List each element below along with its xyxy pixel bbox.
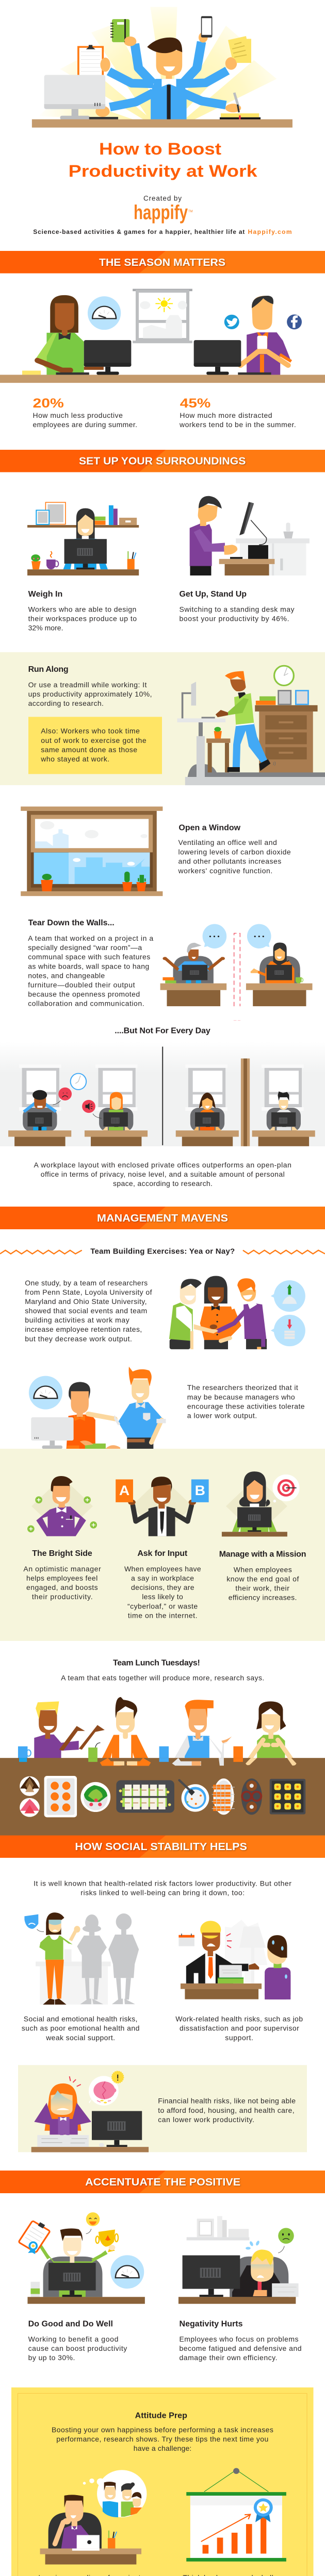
text: enclosed offices [34,1161,291,1188]
illustration: negativity hurts [178,2216,299,2304]
subheading: but not for every day: ....But Not For Every Day [115,1026,210,1036]
text: team building study: increase employee retention rates, [25,1325,142,1333]
text: team building study: Maryland and Ohio State University, [25,1297,147,1306]
text: tear down the walls: A team that worked on a project in a [28,934,153,942]
illustration: work-related risk [178,1920,290,1999]
text: ask for input: Ask for Input [137,1549,188,1558]
panel: run along: according to research. [28,699,104,707]
text: open a window [177,823,291,875]
text: tear down the walls: notes, and changeable [28,971,105,979]
text: team building study: but they decrease work output. [25,1335,132,1343]
text: negativity hurts [180,2320,301,2362]
text: the bright side: their productivity. [32,1592,93,1601]
stat: 20%: 20% [33,396,64,411]
illustration: worried about money [31,2071,149,2152]
text: negativity hurts: Negativity Hurts [180,2320,243,2329]
text: manage with a mission: their work, their [235,1584,289,1592]
text: weigh in: Workers who are able to design [28,605,136,613]
text: manage with a mission: Manage with a Mission [219,1550,306,1558]
created by happify logo: TM [188,210,193,213]
text: negativity hurts: become fatigued and defensive and [180,2344,301,2352]
text: team building study: from Penn State, Loyola University of [25,1288,152,1296]
text: enclosed offices: office in terms of privacy, noise level, and a suitable amount of personal [41,1170,285,1178]
text: open a window: Open a Window [178,823,241,832]
text: manage with a mission: efficiency increases. [229,1594,297,1602]
illustration: mission manager [222,1471,300,1536]
panel: financial risk [18,2065,307,2152]
illustration: treadmill desk [177,666,325,785]
panel: manager types [0,1449,325,1641]
text: team building study: building activities at work may [25,1316,129,1324]
section banner: the season matters [0,251,325,273]
text: the bright side [23,1549,101,1601]
text: weigh in: Weigh In [28,590,62,599]
text: team building study [25,1279,152,1343]
text: team building study: One study, by a team of researchers [25,1279,148,1287]
tagline: Science-based activities & games for a happier, healthier life at [33,228,245,235]
text: tear down the walls: Tear Down the Walls... [28,919,115,927]
text: social and emotional: Social and emotional health risks, [24,2015,137,2023]
illustration: ask for input [116,1477,209,1536]
illustration: manager encouraging employee [29,1367,166,1449]
subheading with zigzags: team building: Team Building Exercises: Yea or Nay? [90,1247,235,1256]
text: enclosed offices: A workplace layout with enclosed private offices outperforms an open-plan [34,1161,291,1169]
text: open a window: workers' cognitive function. [177,867,272,875]
text: work-related [175,2015,303,2042]
text: ask for input: When employees have [124,1565,201,1573]
section banner: the season matters: THE SEASON MATTERS [99,257,225,268]
text: attitude prep intro: Attitude Prep [135,2412,187,2420]
text: tear down the walls: furniture—doubled their output [28,980,135,989]
illustration: war room collaboration [160,924,313,1021]
text: tear down the walls [28,919,153,1008]
text: enclosed offices: space, according to research. [113,1179,213,1188]
text: tear down the walls: communal space with such features [28,953,150,961]
callout: exercise: Also: Workers who took time [41,726,140,735]
illustration: ask for input: A [119,1483,129,1498]
illustration: window [21,806,163,896]
illustration: proud chart [186,2468,286,2562]
text: weigh in: their workspaces produce up to [28,615,137,623]
text: attitude prep intro: Boosting your own happiness before performing a task increases [52,2426,273,2434]
text: tear down the walls: because the openness promoted [28,990,140,998]
illustration: team lunch table [0,1697,325,1836]
header illustration: multitasking worker at desk [32,7,293,128]
text: financial health [158,2097,296,2124]
text: researchers theorized: may be because managers who [187,1393,295,1401]
text: get up, stand up: Get Up, Stand Up [180,590,247,599]
text: manage with a mission: When employees [234,1566,292,1574]
diner three [173,1700,243,1766]
callout: exercise: who stayed at work. [40,755,109,763]
calm worker two [252,1064,315,1146]
text: financial health: Financial health risks, like not being able [158,2097,296,2105]
stat: 45% [179,396,296,429]
text: negativity hurts: damage their own efficiency. [180,2353,278,2362]
text: researchers theorized: encourage these activities tolerate [187,1402,305,1411]
tagline: Happify.com [248,228,292,235]
text: tear down the walls: specially designed “war room”—a [28,943,142,952]
illustration: open plan vs private offices [0,1042,325,1146]
illustration: team handshake [169,1276,305,1349]
text: ask for input: less likely to [142,1592,183,1601]
text: do good: Do Good and Do Well [28,2320,113,2329]
text: open a window: Ventilating an office well and [178,838,277,846]
section banner: accentuate the positive [0,2171,325,2193]
text: negativity hurts: Employees who focus on problems [180,2335,298,2343]
text: social and emotional: such as poor emotional health and [22,2024,139,2032]
stressed worker [8,1064,86,1146]
stat: 20%: employees are during summer. [33,420,137,429]
stat: 45%: workers tend to be in the summer. [179,420,296,429]
text: weigh in: 32% more. [28,624,63,632]
text: open a window: lowering levels of carbon dioxide [178,848,291,856]
title: Productivity at Work [69,162,257,180]
text: weigh in [28,590,137,632]
text: manage with a mission [219,1550,306,1602]
section banner: set up your surroundings: SET UP YOUR SURROUNDINGS [79,455,246,467]
panel: run along: ups productivity approximately 10%, [28,690,152,698]
noisy worker [82,1064,148,1146]
callout: exercise [28,717,162,774]
text: attitude prep intro: performance, research shows. Try these tips the next time you [56,2435,268,2443]
text: the bright side: An optimistic manager [23,1565,101,1573]
text: well-being intro: It is well known that health-related risk factors lower productivity. But other [34,1879,291,1888]
text: get up, stand up: Switching to a standing desk may [180,605,294,613]
panel: run along: Or use a treadmill while working: It [28,681,147,689]
text: do good [28,2320,127,2362]
stat: 20% [33,396,137,429]
panel: run along: Run Along [28,665,69,674]
divider: open plan vs enclosed [162,1047,163,1145]
text: ask for input: decisions, they are [131,1583,194,1591]
text: researchers theorized [187,1383,305,1419]
section banner: how social stability helps: HOW SOCIAL STABILITY HELPS [75,1841,247,1853]
text: well-being intro: risks linked to well-being can bring it down, too: [80,1888,245,1896]
stat: 45%: 45% [180,396,210,411]
text: attitude prep intro [52,2412,273,2452]
text: team lunch: A team that eats together will produce more, research says. [61,1674,264,1682]
text: tear down the walls: collaboration and communication. [28,999,144,1008]
illustration: ask for input: B [195,1483,205,1498]
text: work-related: dissatisfaction and poor supervisor [180,2024,299,2032]
illustration: standing desk [190,496,310,575]
diner one [18,1701,105,1762]
text: ask for input: a say in workplace [131,1574,194,1582]
diner two [88,1697,169,1766]
panel: run along [0,652,325,785]
section banner: management mavens: MANAGEMENT MAVENS [97,1213,228,1224]
callout: exercise: same amount done as those [41,745,137,754]
text: do good: cause can boost productivity [28,2344,127,2352]
section banner: how social stability helps [0,1835,325,1858]
diner four [247,1701,295,1764]
text: do good: Working to benefit a good [28,2335,118,2343]
panel: attitude prep [11,2387,314,2576]
text: well-being intro [34,1879,291,1896]
text: open a window: and other pollutants increases [178,857,281,865]
text: team building study: showed that social events and team [25,1307,147,1315]
text: work-related: Work-related health risks, such as job [175,2015,303,2023]
text: attitude prep intro: have a challenge: [134,2444,191,2452]
stat: 45%: How much more distracted [180,411,272,419]
text: financial health: can lower work productivity. [158,2115,254,2124]
section banner: set up your surroundings [0,450,325,472]
subheading with zigzags: team building [0,1247,325,1256]
created by happify logo [134,195,193,224]
text: manage with a mission: know the end goal of [226,1575,299,1583]
text: tear down the walls: as white boards, wall space to hang [28,962,149,970]
stat: 20%: How much less productive [33,411,123,419]
season illustration: summer office [0,289,325,383]
text: researchers theorized: The researchers theorized that it [187,1383,298,1392]
illustration: do good and do well [19,2212,145,2304]
text: get up, stand up: boost your productivity by 46%. [180,615,289,623]
calm worker [176,1064,239,1146]
text: get up, stand up [180,590,294,623]
text: financial health: to afford food, housing, and health care, [158,2106,295,2114]
created by happify logo: Created by [143,195,182,202]
text: the bright side: The Bright Side [32,1549,92,1558]
text: ask for input: time on the internet. [128,1611,197,1619]
text: work-related: support. [225,2033,253,2042]
text: do good: by up to 30%. [28,2353,75,2362]
text: ask for input [124,1549,201,1619]
text: the bright side: helps employees feel [26,1574,98,1582]
text: social and emotional: weak social support. [45,2033,115,2042]
food platters [20,1776,305,1817]
title [69,140,257,180]
text: researchers theorized: a lower work output. [187,1411,257,1419]
illustration: imagine loved ones [40,2470,147,2565]
text: ask for input: “cyberloaf,” or waste [127,1602,198,1610]
section banner: management mavens [0,1207,325,1229]
created by happify logo: happify [134,202,188,224]
illustration: optimistic manager [27,1476,97,1536]
callout: exercise: out of work to exercise got the [41,736,147,744]
text: team lunch [61,1658,264,1682]
wood partition [241,1058,250,1146]
title: How to Boost [99,140,221,158]
illustration: personalised workspace [27,503,139,575]
text: team lunch: Team Lunch Tuesdays! [113,1658,200,1667]
section banner: accentuate the positive: ACCENTUATE THE POSITIVE [85,2177,240,2188]
illustration: social and emotional risk [24,1912,139,2005]
text: the bright side: engaged, and boosts [26,1583,98,1591]
text: social and emotional [22,2015,139,2042]
